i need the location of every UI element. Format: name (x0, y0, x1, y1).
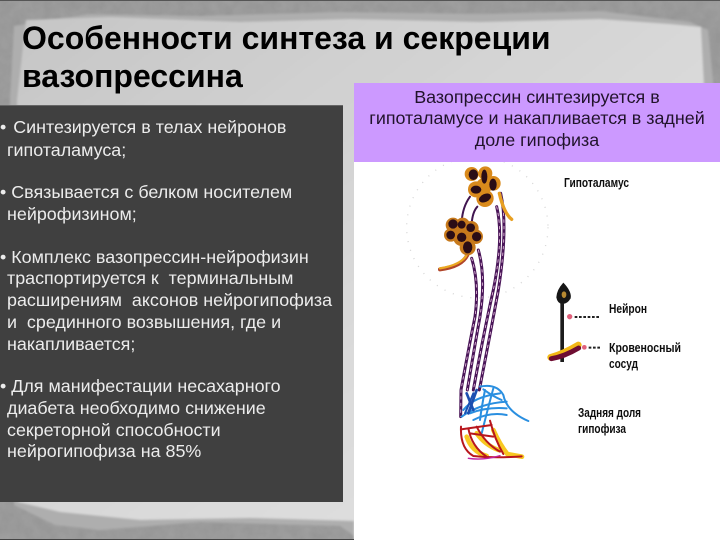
bullet: binding: • Связывается с белком носителем (0, 182, 292, 202)
bullet: diabetes: • Для манифестации несахарного (0, 376, 281, 396)
panel: bullet list: секреторной способности (7, 420, 221, 440)
blue capillary network (462, 386, 528, 433)
panel: bullet list: гипоталамуса; (7, 140, 126, 160)
label: neuron: Нейрон (609, 302, 647, 316)
bullet: diabetes (0, 376, 281, 461)
label: pituitary: гипофиза (578, 422, 627, 436)
label: blood vessel: Кровеносный (609, 341, 681, 355)
red capillary network (461, 421, 522, 459)
label: vessel line 2: сосуд (609, 357, 638, 371)
label: hypothalamus: Гипоталамус (564, 176, 629, 190)
bullet: synthesis: • Синтезируется в телах нейронов (0, 117, 286, 137)
panel: bullet list: траспортируется к терминальным (7, 268, 293, 288)
panel: purple callout: гипоталамусе и накапливается в задней (369, 108, 705, 128)
dotted circle: hypothalamus (407, 157, 548, 298)
icon: neuron legend (551, 283, 601, 362)
panel: diagram (354, 162, 720, 540)
bullet: binding (0, 182, 292, 224)
bullet: transport: • Комплекс вазопрессин-нейрофизин (0, 247, 309, 267)
panel: purple callout: доле гипофиза (475, 130, 599, 150)
panel: bullet list (0, 105, 343, 502)
panel: bullet list: диабета необходимо снижение (7, 398, 266, 418)
neuron cluster: lower (440, 218, 483, 269)
title: Особенности синтеза и секреции вазопрессина (22, 20, 551, 94)
labels (564, 176, 681, 436)
bullet: transport (0, 247, 332, 354)
bullet: synthesis (0, 117, 286, 160)
panel: bullet list: нейрофизином; (7, 204, 137, 224)
panel: purple callout: Вазопрессин синтезируется в (414, 87, 660, 107)
panel: bullet list: и срединного возвышения, где и (7, 312, 281, 332)
panel: purple callout (354, 83, 720, 162)
panel: bullet list: нейрогипофиза на 85% (7, 441, 201, 461)
panel: bullet list: расширениям аксонов нейрогипофиза (7, 290, 332, 310)
neuron cluster: upper (465, 166, 512, 219)
icon: blood vessel legend (551, 345, 578, 357)
panel: bullet list: накапливается; (7, 334, 135, 354)
label: posterior lobe: Задняя доля (578, 406, 641, 420)
nerve fibers (461, 193, 504, 417)
